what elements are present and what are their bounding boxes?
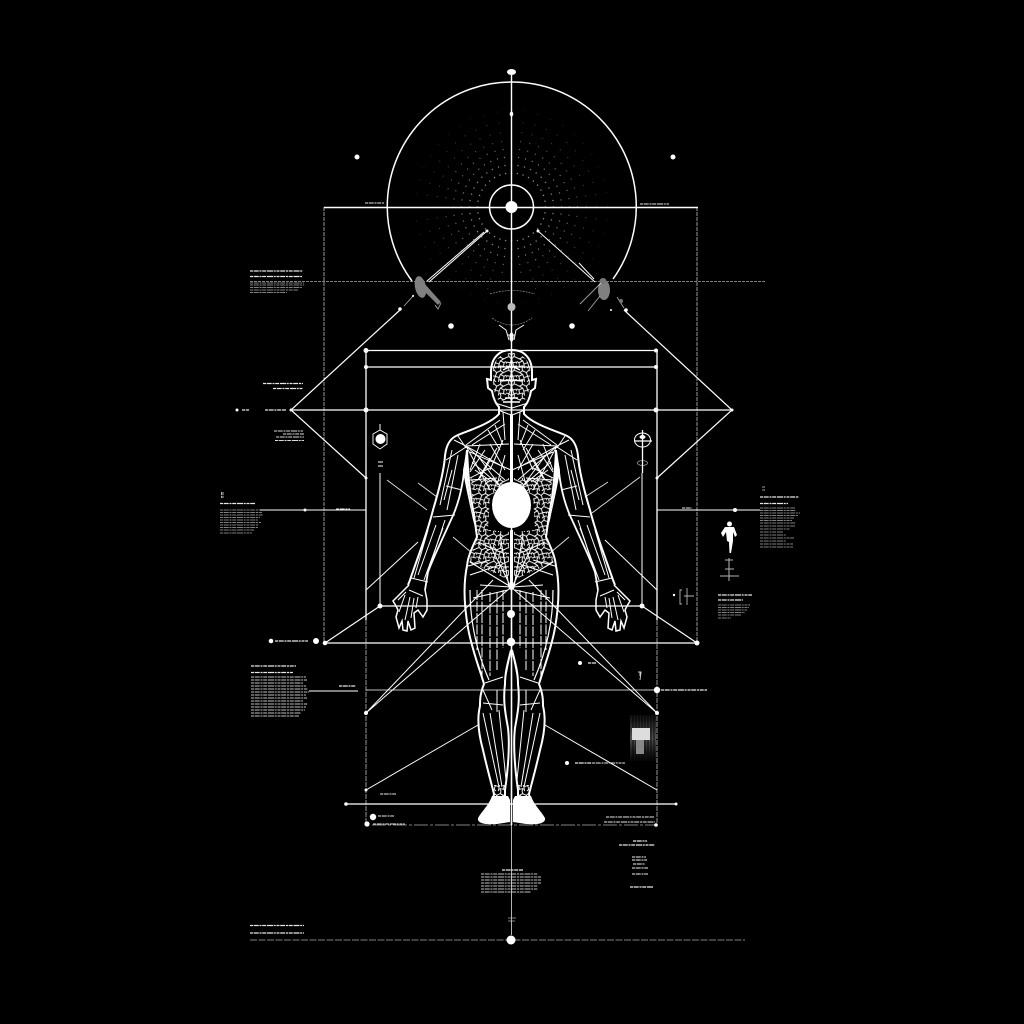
left struts	[427, 231, 487, 282]
pelvic node	[508, 584, 514, 590]
centre dot	[506, 201, 518, 213]
diagram root	[220, 69, 800, 944]
central axis	[510, 350, 512, 825]
text block: bottom centre (illegible microtext)	[481, 870, 541, 921]
signal strip	[630, 715, 656, 761]
icon: right grey capsule	[580, 278, 624, 311]
thigh node	[507, 638, 515, 646]
inner ring	[490, 185, 534, 229]
text block: lower right (illegible microtext)	[718, 595, 752, 618]
dotted rings	[416, 111, 608, 303]
axis node	[510, 112, 513, 116]
icon: right gyroscope	[634, 430, 652, 473]
icon: small pin	[638, 672, 641, 680]
text block: bottom left (illegible microtext)	[250, 926, 304, 933]
figure: mirrored right half	[512, 350, 630, 824]
icon: left orb	[373, 424, 387, 466]
text block: bottom right column (illegible microtext)	[619, 841, 655, 887]
text block: upper left (illegible microtext)	[250, 271, 304, 292]
human figure	[393, 350, 630, 825]
text block: left labels (illegible microtext)	[242, 384, 304, 440]
outer arc	[387, 82, 636, 281]
icon: small cross glyph	[720, 558, 739, 581]
construction lines	[250, 72, 766, 940]
neck and sternum band	[510, 415, 513, 585]
crown cluster above head	[490, 290, 535, 342]
labels along lines (illegible microtext)	[275, 203, 707, 824]
right struts	[538, 231, 595, 282]
top marker	[507, 69, 516, 75]
text block: mid right (illegible microtext)	[760, 487, 800, 547]
scattered nodes	[236, 154, 737, 944]
icon: runner silhouette	[721, 522, 737, 553]
radial diagram	[387, 69, 636, 303]
text block: lower left (illegible microtext)	[251, 666, 358, 716]
icon: left grey capsule	[404, 275, 441, 309]
hip node	[507, 610, 515, 618]
text block: mid left (illegible microtext)	[220, 492, 263, 533]
icon: bracket glyph	[680, 588, 694, 605]
figure: left half	[393, 350, 511, 824]
solar plexus core	[492, 482, 531, 528]
